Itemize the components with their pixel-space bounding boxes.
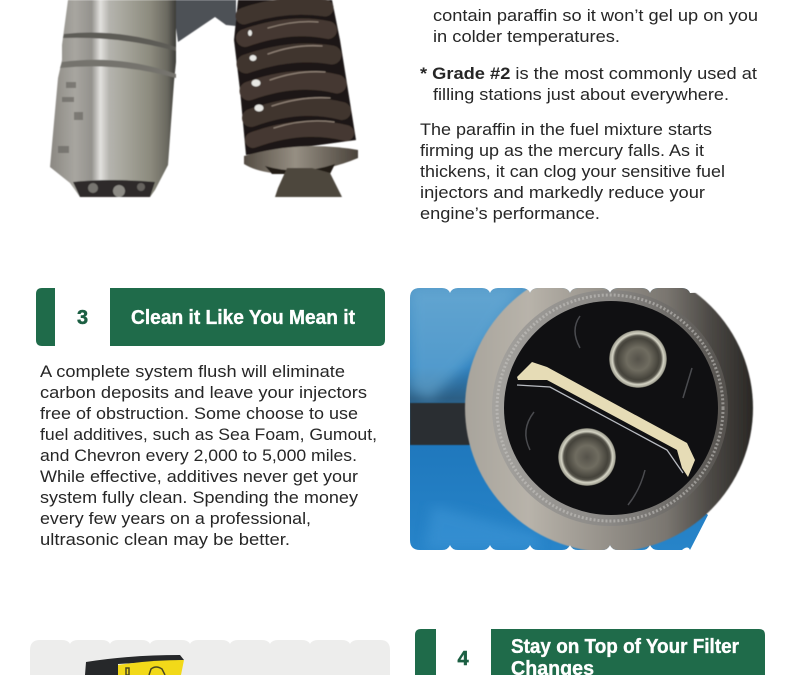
photo: fuel filter	[30, 640, 390, 675]
step 4 title	[511, 636, 739, 675]
text block: system flush: A complete system flush will eliminate	[40, 362, 345, 381]
upper port	[609, 330, 667, 388]
paraffin paragraph: firming up as the mercury falls. As it	[420, 141, 704, 160]
text block: system flush: While effective, additives never get your	[40, 467, 358, 486]
grade 2 bullet: * Grade #2 is the most commonly used at	[420, 64, 757, 83]
black nozzle face	[504, 301, 718, 515]
step 3 title bar	[110, 288, 385, 346]
step 3 number: 3	[77, 307, 88, 329]
text block: system flush: free of obstruction. Some choose to use	[40, 404, 358, 423]
step 4 title bar	[491, 629, 765, 675]
paraffin paragraph: thickens, it can clog your sensitive fuel	[420, 162, 725, 181]
grade 2 bullet: filling stations just about everywhere.	[433, 85, 729, 104]
knurled ring	[492, 290, 728, 526]
spring paint chips	[248, 30, 264, 112]
step 4 accent bar	[415, 629, 436, 675]
text block: fuel grades	[420, 6, 758, 223]
injector spring seat	[244, 146, 358, 174]
text block: system flush: every few years on a professional,	[40, 509, 311, 528]
filter black casing	[85, 655, 184, 675]
moulded marks	[526, 316, 692, 505]
filter photo background	[30, 640, 390, 675]
paraffin paragraph: injectors and markedly reduce your	[420, 183, 705, 202]
grade 1 continuation: contain paraffin so it won’t gel up on you	[433, 6, 758, 25]
thin divider line	[517, 385, 683, 473]
filter label icon	[126, 667, 165, 675]
nozzle tip	[73, 180, 155, 197]
grade 1 continuation: in colder temperatures.	[433, 27, 620, 46]
nozzle engraved marks	[58, 82, 83, 153]
injector spring	[234, 0, 356, 155]
paraffin paragraph	[420, 120, 725, 223]
injector connector body	[172, 0, 236, 42]
text block: system flush: carbon deposits and leave your injectors	[40, 383, 367, 402]
text block: system flush: and Chevron every 2,000 to 5,000 miles.	[40, 446, 357, 465]
filter yellow label	[118, 660, 184, 675]
text block: system flush	[40, 362, 377, 549]
blue plastic background	[410, 288, 708, 550]
grade 2 bullet	[420, 64, 757, 104]
paraffin paragraph: engine’s performance.	[420, 204, 600, 223]
step 3 accent bar	[36, 288, 55, 346]
text block: system flush: fuel additives, such as Sea Foam, Gumout,	[40, 425, 377, 444]
step 3 title: Clean it Like You Mean it	[131, 307, 355, 329]
photo: fuel injector	[50, 0, 358, 197]
step 4 title: Stay on Top of Your Filter	[511, 636, 739, 658]
heading: step 4	[415, 629, 765, 675]
injector spring tip	[275, 168, 342, 197]
steel outer disc	[465, 264, 753, 552]
cream seal strip	[517, 362, 695, 477]
photo: injector nozzle end	[410, 264, 753, 552]
injector nozzle barrel	[50, 0, 176, 197]
grade 1 continuation	[433, 6, 758, 46]
text block: system flush: system fully clean. Spending the money	[40, 488, 359, 507]
text block: system flush: ultrasonic clean may be better.	[40, 530, 290, 549]
paraffin paragraph: The paraffin in the fuel mixture starts	[420, 120, 712, 139]
step 4 number: 4	[457, 648, 469, 670]
lower port	[558, 428, 616, 486]
heading: step 3	[36, 288, 385, 346]
